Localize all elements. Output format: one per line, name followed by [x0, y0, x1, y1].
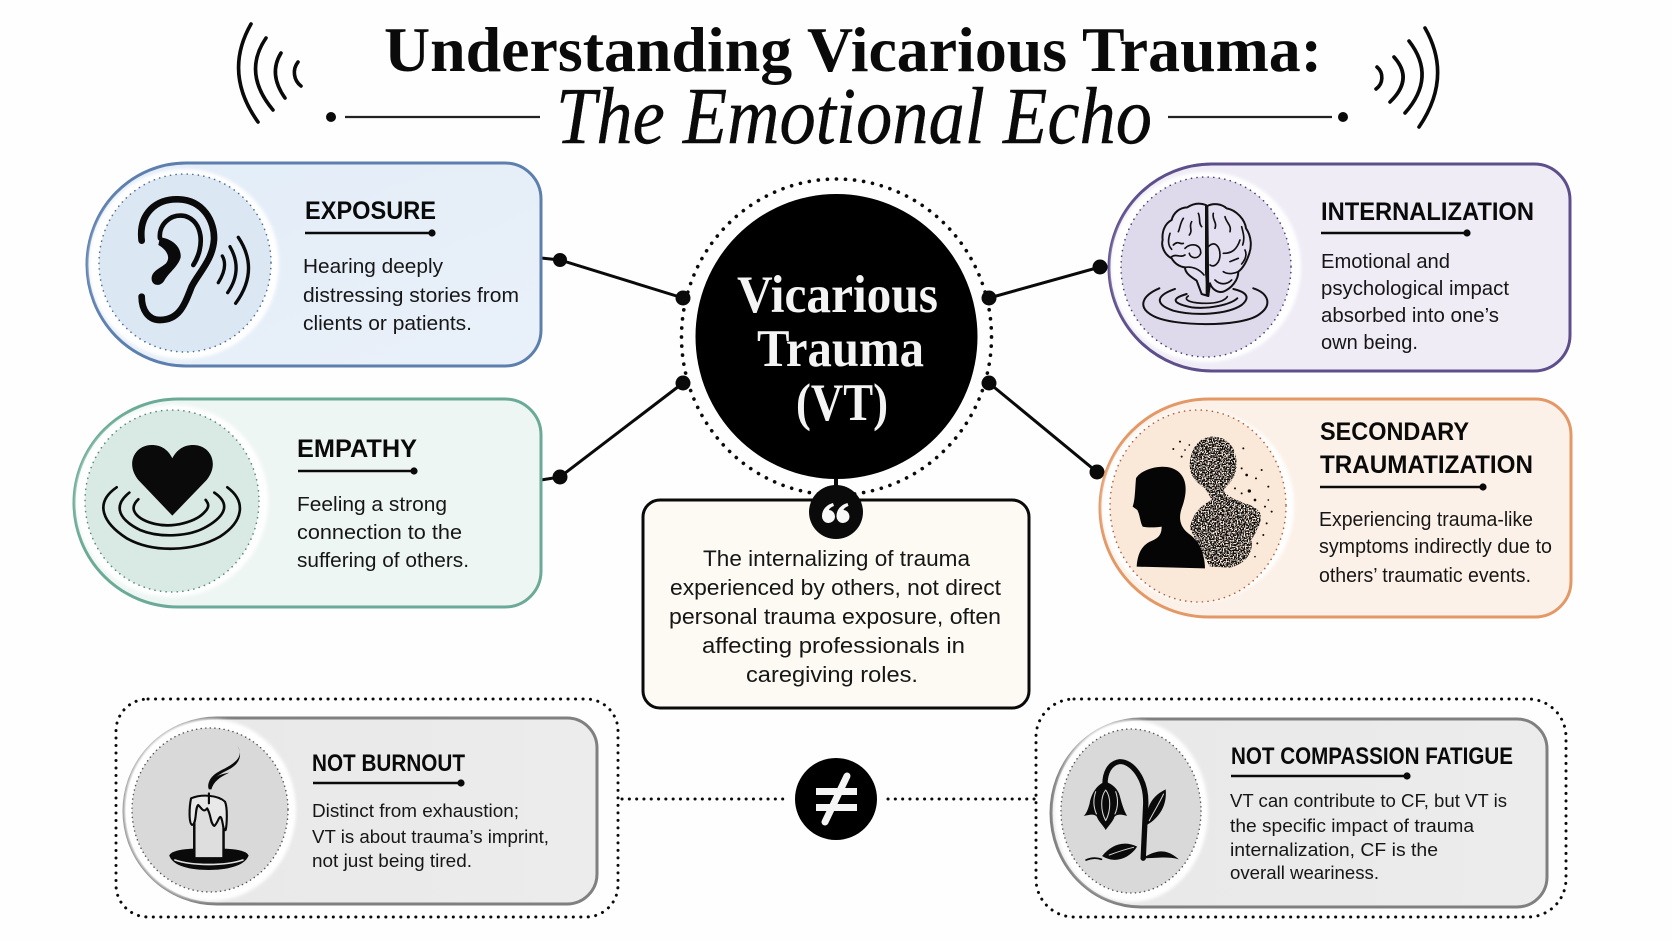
icon: burnt candle — [169, 746, 249, 870]
body text: Emotional and — [1321, 250, 1450, 273]
heading — [1320, 418, 1533, 479]
body text: not just being tired. — [312, 850, 472, 871]
left subtitle rule — [326, 112, 540, 122]
underline — [1231, 772, 1411, 780]
body text: distressing stories from — [303, 284, 519, 307]
icon: brain over ripples — [1143, 204, 1267, 324]
body text: Feeling a strong — [297, 493, 447, 516]
heading: INTERNALIZATION — [1321, 198, 1534, 226]
panel: not burnout — [116, 699, 618, 917]
heading: Understanding Vicarious Trauma: Understanding Vicarious Trauma: — [384, 14, 1322, 85]
panel: internalization — [1109, 164, 1570, 371]
panel: exposure — [87, 163, 541, 366]
body text: connection to the — [297, 521, 462, 544]
hub label: Trauma — [757, 320, 924, 378]
body text: own being. — [1321, 331, 1418, 354]
heading: EXPOSURE — [305, 197, 436, 225]
icon: not-equal symbol — [795, 758, 877, 840]
panel: empathy — [74, 399, 541, 607]
body text: absorbed into one’s — [1321, 304, 1499, 327]
right subtitle rule — [1168, 112, 1348, 122]
subheading: The Emotional Echo: The Emotional Echo — [556, 73, 1152, 161]
icon: ear with sound waves — [141, 199, 249, 320]
icon: heart with ripples — [103, 445, 240, 549]
dotted link between comparisons — [622, 798, 1036, 800]
title block — [239, 14, 1438, 161]
body text — [1230, 790, 1507, 883]
definition text: The internalizing of trauma — [703, 546, 971, 571]
body text — [303, 255, 519, 335]
hub label: Vicarious — [737, 266, 938, 324]
panel: definition quote — [643, 479, 1029, 708]
panel: secondary traumatization — [1100, 399, 1571, 617]
hub label: (VT) — [796, 374, 888, 432]
underline — [1320, 483, 1487, 491]
hub label — [737, 266, 938, 432]
body text — [312, 800, 549, 871]
underline — [298, 467, 418, 475]
central hub: Vicarious Trauma — [682, 179, 992, 495]
body text — [297, 493, 469, 572]
heading: SECONDARY — [1320, 418, 1469, 446]
body text — [1319, 508, 1552, 587]
heading: TRAUMATIZATION — [1320, 451, 1533, 479]
connectors to centre — [541, 253, 1109, 484]
icon: left echo arcs — [239, 24, 301, 122]
underline — [313, 779, 465, 787]
heading: NOT COMPASSION FATIGUE — [1231, 743, 1513, 770]
definition text: caregiving roles. — [746, 662, 918, 687]
body text: suffering of others. — [297, 549, 469, 572]
body text: VT is about trauma’s imprint, — [312, 826, 549, 847]
icon: silhouette with dissolving echo figure — [1133, 437, 1273, 568]
body text — [1321, 250, 1509, 354]
icon: quote mark — [809, 485, 863, 539]
body text: Distinct from exhaustion; — [312, 800, 519, 821]
body text: Experiencing trauma-like — [1319, 508, 1533, 531]
heading: EMPATHY — [297, 435, 417, 463]
body text: the specific impact of trauma — [1230, 815, 1475, 836]
definition text — [669, 546, 1001, 687]
body text: VT can contribute to CF, but VT is — [1230, 790, 1507, 811]
definition text: experienced by others, not direct — [670, 575, 1001, 600]
body text: psychological impact — [1321, 277, 1509, 300]
underline — [1321, 229, 1471, 237]
body text: internalization, CF is the — [1230, 839, 1438, 860]
icon: wilting flower — [1084, 762, 1179, 860]
body text: Hearing deeply — [303, 255, 444, 278]
icon: right echo arcs — [1376, 28, 1438, 127]
underline — [305, 229, 436, 237]
body text: clients or patients. — [303, 312, 472, 335]
definition text: affecting professionals in — [702, 633, 965, 658]
body text: symptoms indirectly due to — [1319, 535, 1552, 558]
panel: not compassion fatigue — [1036, 699, 1566, 917]
body text: others’ traumatic events. — [1319, 564, 1531, 587]
heading: NOT BURNOUT — [312, 750, 465, 777]
body text: overall weariness. — [1230, 862, 1379, 883]
definition text: personal trauma exposure, often — [669, 604, 1001, 629]
